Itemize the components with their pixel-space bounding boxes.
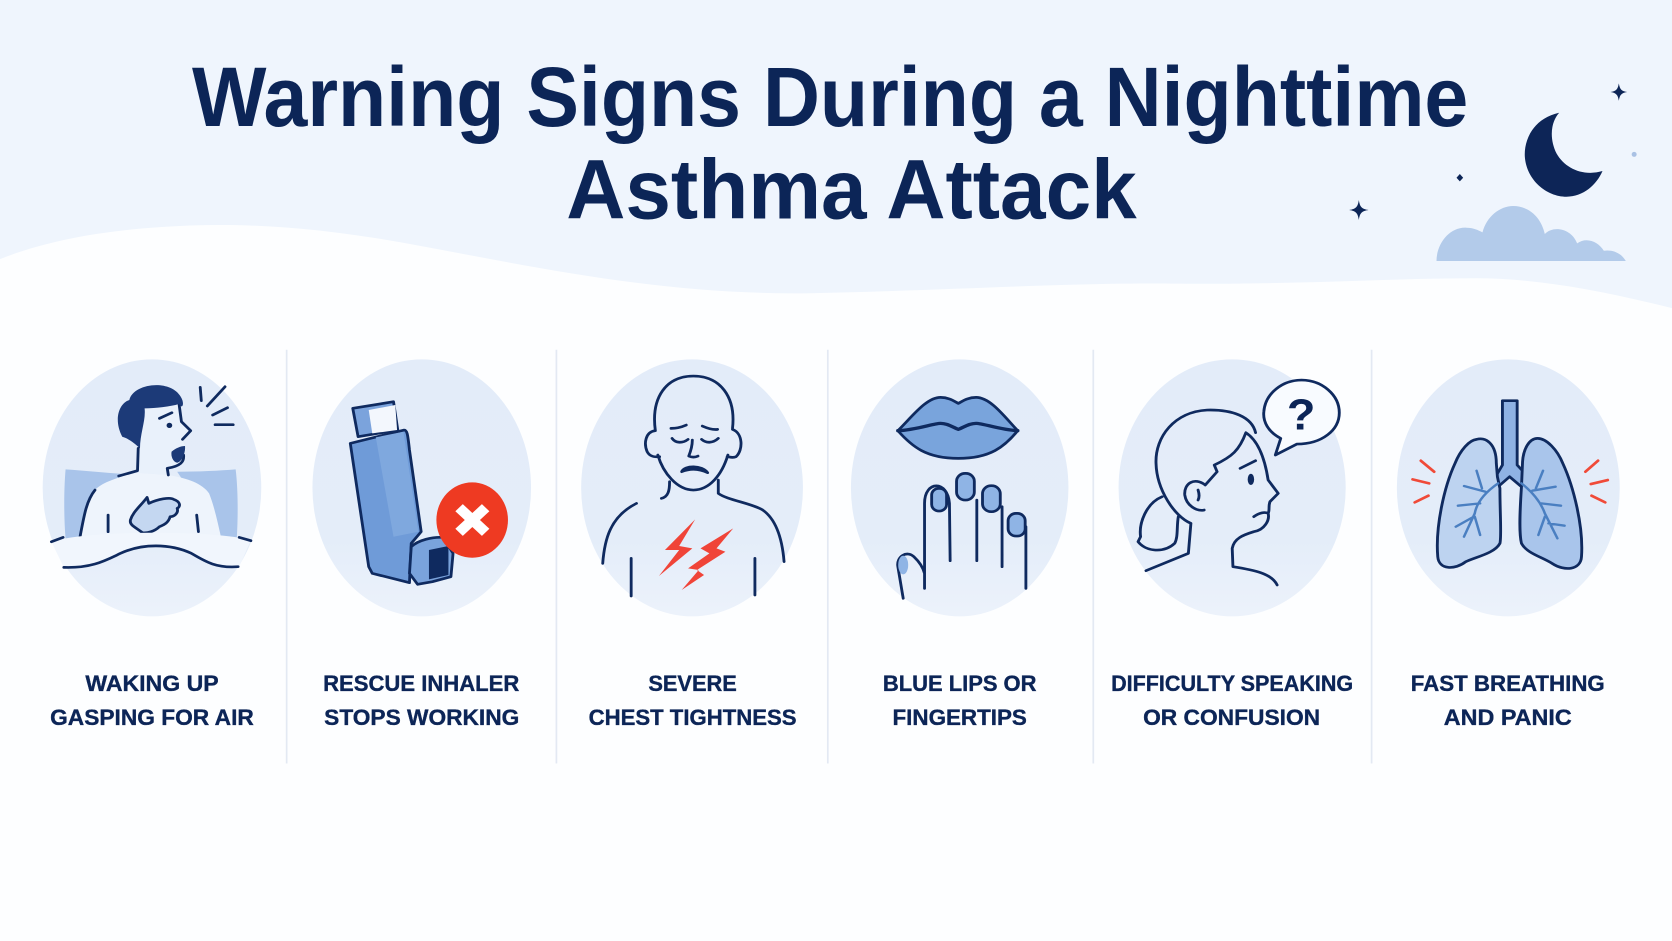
label: RESCUE INHALER [323,671,519,696]
icon: confused person with speech bubble: ? [1287,390,1315,439]
icon: small star [1456,174,1463,181]
oval background [1119,359,1346,616]
icon: moon [1525,113,1602,197]
label [1111,671,1353,730]
label: SEVERE [648,671,737,696]
icon: blue lips and fingers [898,397,1026,598]
label: OR CONFUSION [1143,705,1320,730]
label: CHEST TIGHTNESS [589,705,797,730]
oval background [312,359,531,616]
label [883,671,1036,730]
icon: lungs [1413,401,1608,568]
oval background [1397,359,1620,616]
label: DIFFICULTY SPEAKING [1111,671,1353,696]
icon: person with chest pain [603,376,784,596]
icon: star top right [1610,83,1627,101]
title: Warning Signs During a Nighttime [192,50,1468,144]
night sky decoration [1349,83,1637,261]
icon: inhaler with red X [350,402,508,584]
label [1411,671,1605,730]
panel: difficulty speaking [1111,359,1353,730]
label [323,671,519,730]
label: STOPS WORKING [324,705,519,730]
label: FAST BREATHING [1411,671,1605,696]
title [192,50,1468,237]
panel: fast breathing [1397,359,1620,730]
panel: chest tightness [581,359,803,730]
label [50,671,254,730]
label: AND PANIC [1444,705,1572,730]
label: FINGERTIPS [893,705,1027,730]
label: WAKING UP [85,671,219,696]
icon: confused person with speech bubble [1138,380,1339,585]
panel: rescue inhaler [312,359,531,730]
icon: cloud [1436,206,1626,261]
title: Asthma Attack [566,143,1137,237]
label: BLUE LIPS OR [883,671,1036,696]
label [589,671,797,730]
panel: waking up gasping [43,359,261,730]
icon: dot [1632,152,1637,157]
panel: blue lips or fingertips [851,359,1068,730]
oval background [581,359,803,616]
icon: star lower left [1349,200,1368,220]
icon: man in bed [51,385,251,567]
header wave background [0,0,1672,308]
label: GASPING FOR AIR [50,705,254,730]
oval background [43,359,261,616]
oval background [851,359,1068,616]
